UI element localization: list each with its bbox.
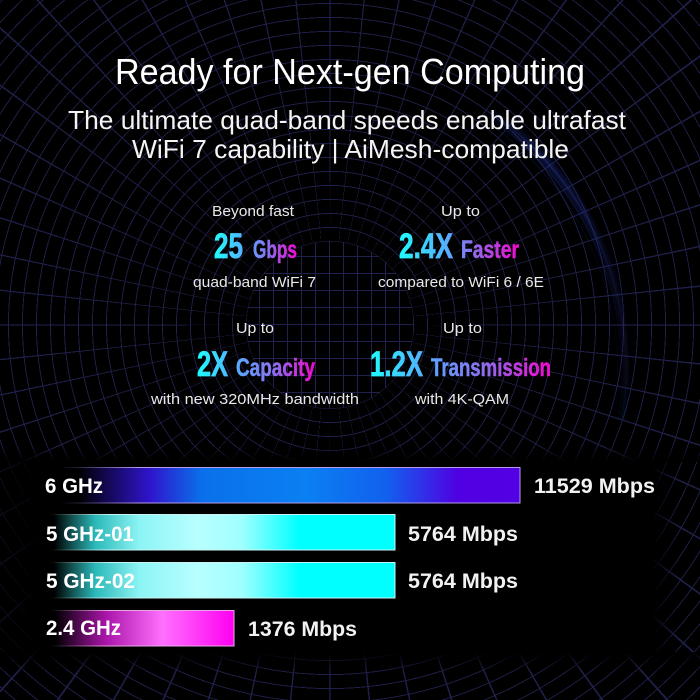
stat: 2.4X Faster: Up to: [441, 203, 480, 220]
stat: 1.2X Transmission: Transmission: [431, 354, 551, 382]
stat: 1.2X Transmission: Up to: [443, 320, 482, 337]
stat: 2.4X Faster: compared to WiFi 6 / 6E: [378, 274, 544, 291]
stat: 2.4X Faster: [378, 203, 544, 291]
bar: 6 GHz: 11529 Mbps: [534, 475, 655, 498]
bar: 6 GHz: 6 GHz: [45, 475, 103, 498]
subtitle: WiFi 7 capability | AiMesh-compatible: [132, 134, 569, 164]
subtitle: The ultimate quad-band speeds enable ultrafast: [68, 105, 627, 135]
bar: 5 GHz-01: [46, 514, 518, 550]
stat: 1.2X Transmission: [370, 320, 551, 408]
stat: 25 Gbps: quad-band WiFi 7: [193, 274, 316, 291]
stat: 2X Capacity: 2X: [197, 345, 228, 384]
stat: 2.4X Faster: Faster: [461, 236, 519, 264]
bar: 5 GHz-02: 5764 Mbps: [408, 570, 518, 593]
stat: 2X Capacity: [150, 320, 359, 408]
subtitle: [68, 105, 627, 164]
bar chart backdrop: [0, 446, 700, 672]
bar: 5 GHz-01: 5764 Mbps: [408, 523, 518, 546]
bar: 2.4 GHz: [46, 610, 357, 646]
stat: 25 Gbps: [193, 203, 316, 291]
stat: 1.2X Transmission: 1.2X: [370, 345, 423, 384]
bar: 5 GHz-02: [46, 562, 518, 598]
stat: 2.4X Faster: 2.4X: [399, 227, 453, 266]
stat: 2X Capacity: with new 320MHz bandwidth: [150, 391, 359, 408]
stat: 25 Gbps: Gbps: [253, 236, 297, 264]
bar: 6 GHz: [45, 468, 655, 503]
stat: 1.2X Transmission: with 4K-QAM: [414, 391, 509, 408]
stat: 25 Gbps: Beyond fast: [212, 203, 295, 220]
stat: 2X Capacity: Capacity: [236, 354, 315, 382]
bar: 2.4 GHz: 1376 Mbps: [248, 618, 357, 641]
stat: 2X Capacity: Up to: [236, 320, 274, 337]
title: Ready for Next-gen Computing: [115, 51, 585, 92]
bar: 5 GHz-02: 5 GHz-02: [46, 570, 135, 593]
bar: 2.4 GHz: 2.4 GHz: [46, 617, 121, 640]
bar: 5 GHz-01: 5 GHz-01: [46, 523, 134, 546]
stat: 25 Gbps: 25: [214, 227, 243, 266]
